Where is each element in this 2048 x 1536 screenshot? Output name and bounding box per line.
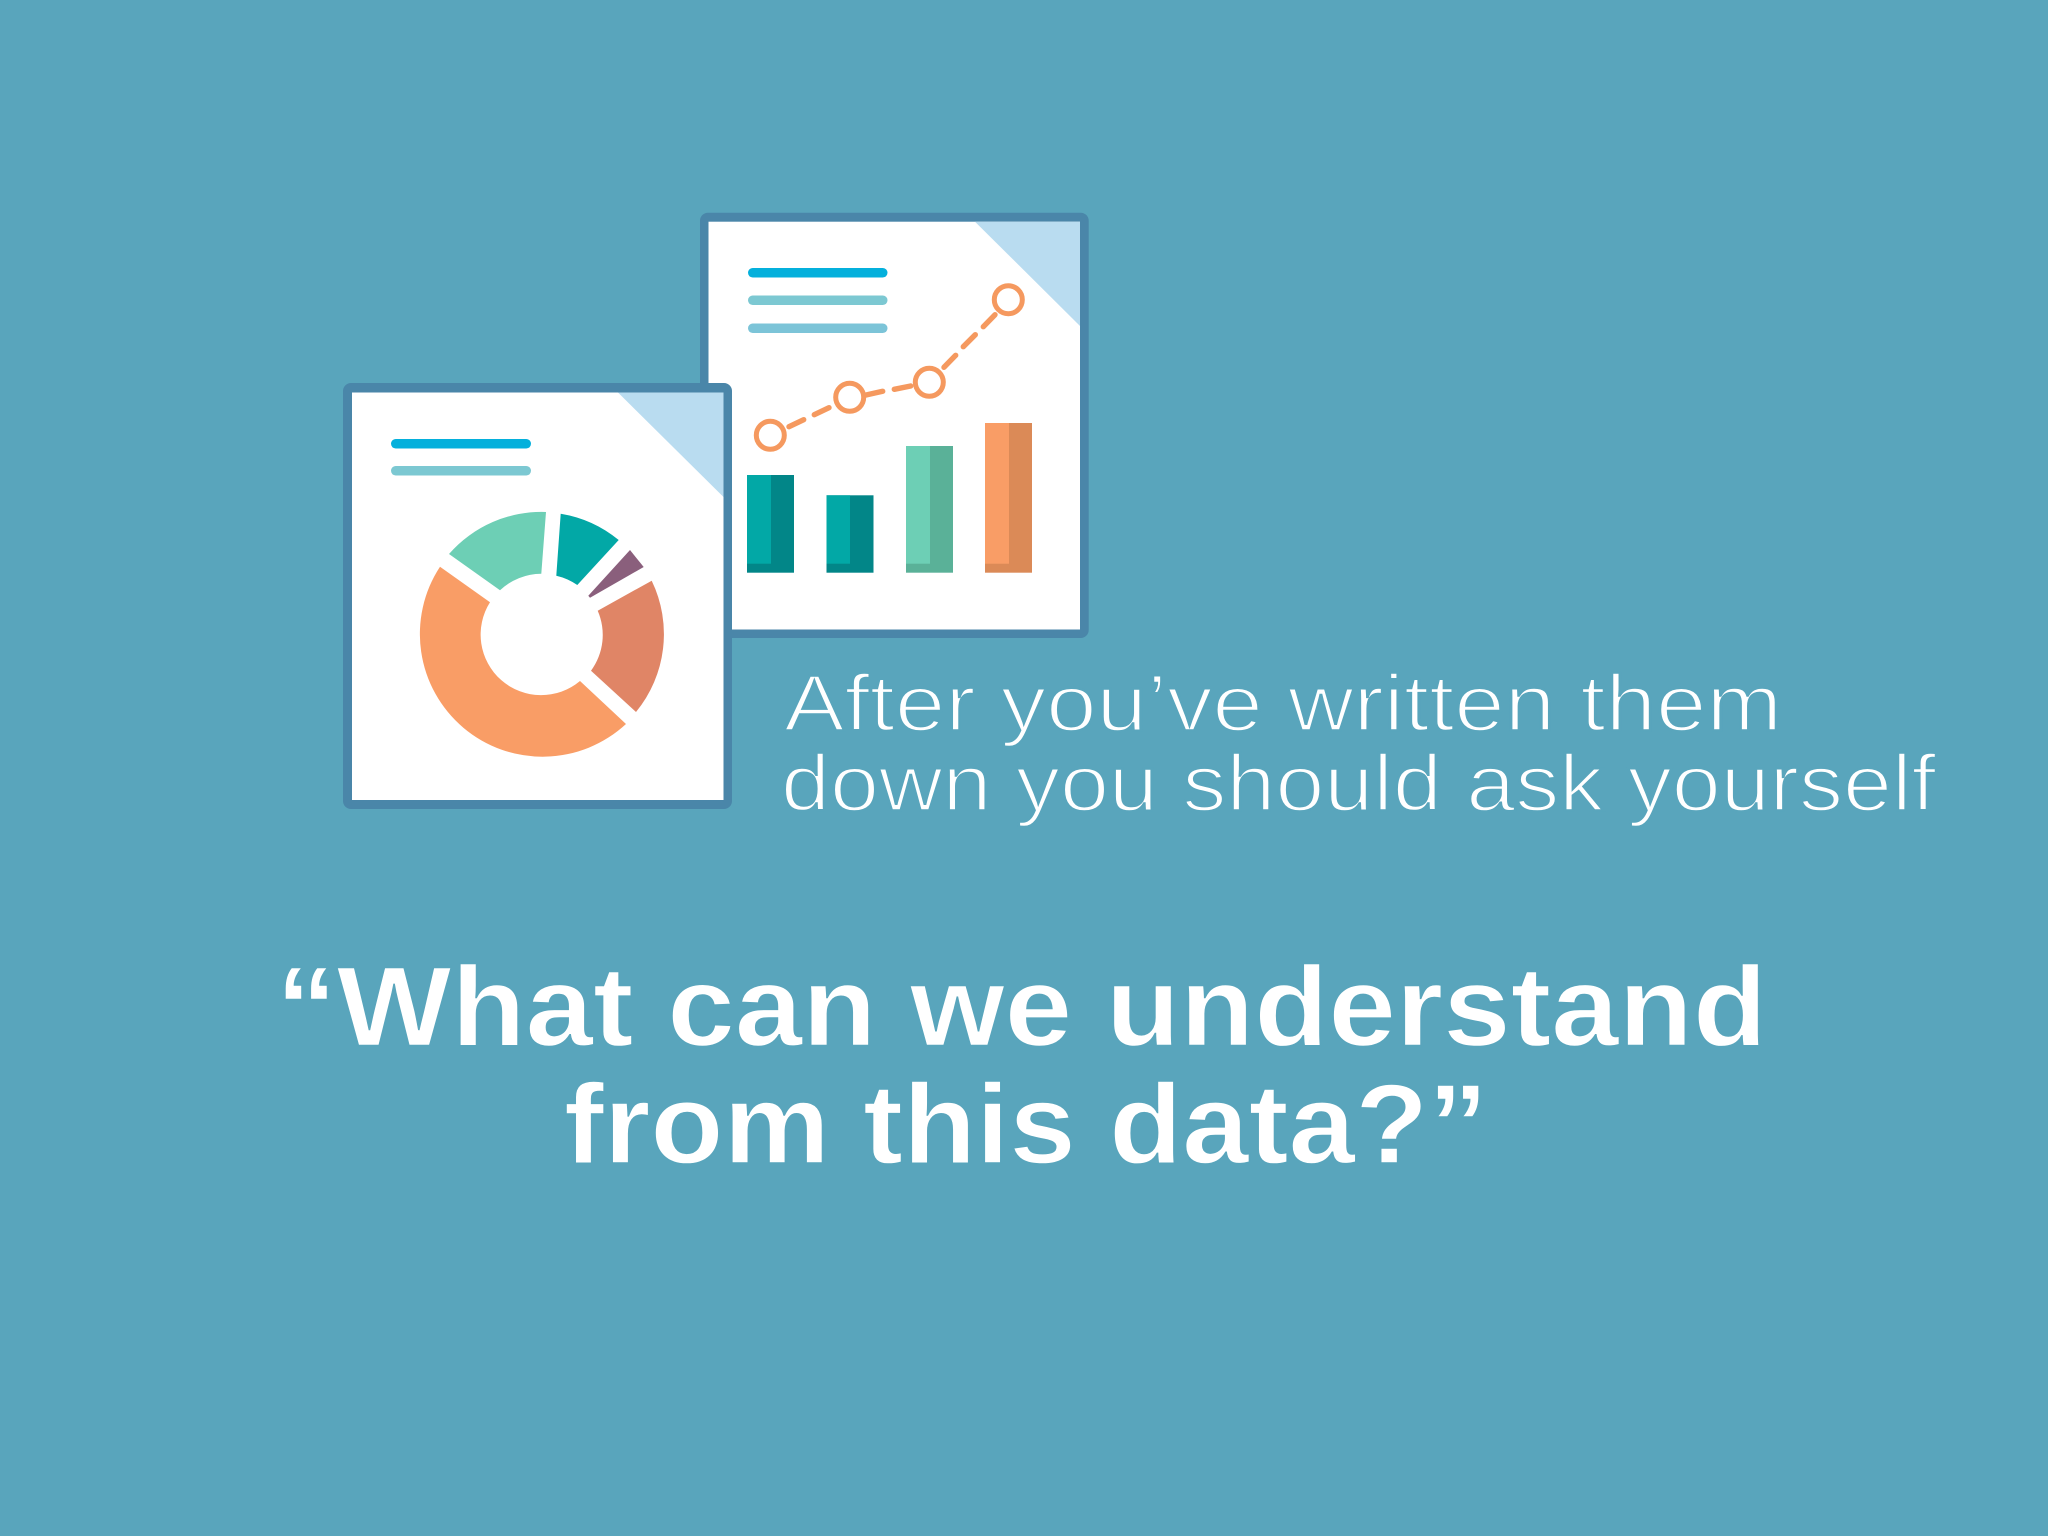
segment: teal <box>556 514 619 585</box>
panel: line and bar chart document <box>700 213 1089 638</box>
panel: donut chart document <box>343 383 732 809</box>
bar 3 <box>906 446 953 573</box>
segment: orange <box>420 567 626 757</box>
text lines placeholder <box>748 268 888 333</box>
bar 4 <box>985 423 1032 573</box>
bar 1 <box>747 475 794 573</box>
text block: subtitle <box>781 659 1937 828</box>
heading: quote: from this data?” <box>564 1061 1488 1187</box>
icon: folded page corner <box>618 392 724 497</box>
donut chart <box>420 512 664 757</box>
segment: red <box>591 581 664 712</box>
segment: light green <box>449 512 546 590</box>
text lines placeholder <box>391 439 531 476</box>
bar 2 <box>826 495 874 573</box>
segment: purple <box>588 550 644 598</box>
icon: folded page corner <box>975 222 1080 326</box>
heading: quote: “What can we understand <box>276 944 1767 1070</box>
heading: quote <box>276 944 1767 1187</box>
text block: subtitle: After you’ve written them <box>784 659 1782 748</box>
line chart: dashed orange trend with circle markers <box>756 286 1022 449</box>
bar chart <box>747 423 1032 573</box>
text block: subtitle: down you should ask yourself <box>781 739 1937 828</box>
